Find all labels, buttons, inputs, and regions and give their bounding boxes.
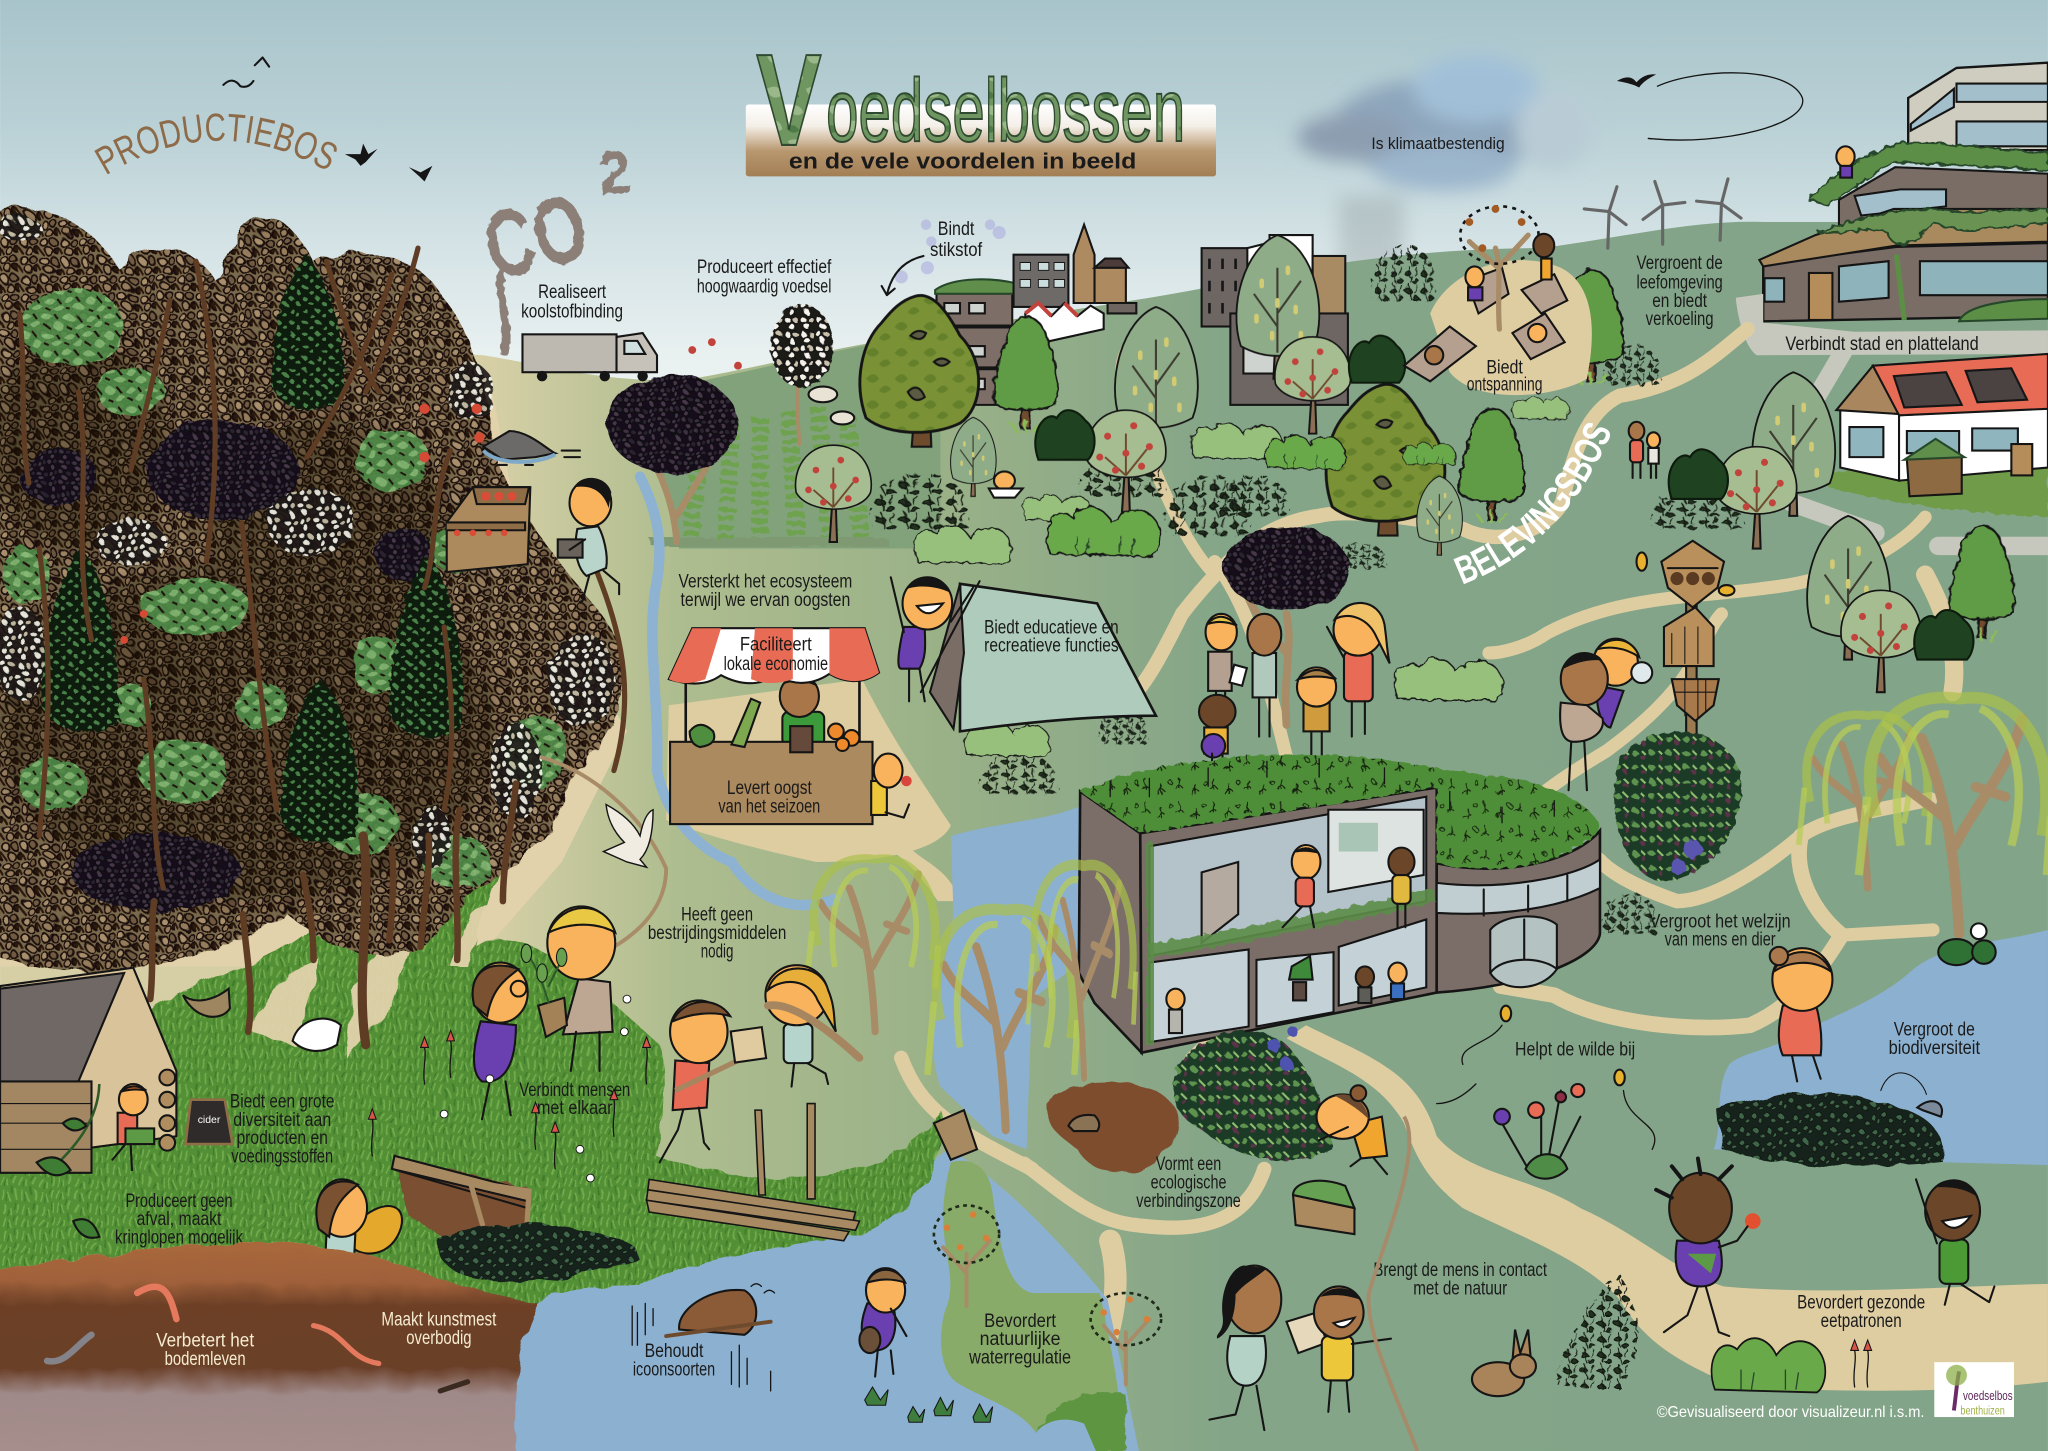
label: koolstofbinding: koolstofbinding xyxy=(521,301,623,322)
label: vergroent de leefomgeving: leefomgeving xyxy=(1637,273,1723,294)
mulch pile with hedgehog xyxy=(1045,1082,1179,1172)
label: diversiteit: producten en xyxy=(236,1128,328,1149)
seller xyxy=(780,675,824,746)
small fruit tree on island xyxy=(934,1205,999,1306)
label: hoogwaardig voedsel: Produceert effectief xyxy=(697,257,832,278)
vegetable crate xyxy=(1293,1181,1354,1234)
CO2 smoke xyxy=(473,138,634,355)
girl and man with seedling xyxy=(473,906,615,1119)
island with water regulation label: Bevordert xyxy=(984,1311,1057,1332)
title banner: V xyxy=(756,27,822,173)
jumping child xyxy=(1916,1179,1994,1305)
girl with wheelbarrow xyxy=(303,1179,402,1313)
island with water regulation label xyxy=(941,1161,1126,1451)
logo voedselbos benthuizen xyxy=(1934,1362,2014,1417)
island with water regulation label: waterregulatie xyxy=(968,1347,1071,1368)
apple crate xyxy=(447,487,530,572)
light green bushes xyxy=(914,397,1569,757)
soil layers: Verbetert het xyxy=(156,1331,255,1352)
vertical planted column xyxy=(1615,732,1741,882)
lily pads xyxy=(1938,923,1996,965)
title PRODUCTIEBOS: PRODUCTIEBOS xyxy=(94,113,337,174)
green roof xyxy=(1080,754,1600,869)
big right-hand willows xyxy=(1799,697,2048,934)
rabbit xyxy=(1472,1330,1536,1396)
water lilies xyxy=(865,1387,993,1422)
child at shed xyxy=(112,1084,154,1170)
white blossom crowns xyxy=(0,215,615,867)
pear trees xyxy=(951,235,1890,660)
market stall: Faciliteert xyxy=(740,634,812,655)
label: biodiversiteit: Vergroot de xyxy=(1894,1020,1975,1041)
right lake xyxy=(1714,930,2048,1165)
title banner: oedselbossen xyxy=(826,61,1185,160)
market stall: lokale economie xyxy=(724,654,828,675)
market stall xyxy=(669,628,879,824)
tall green trees xyxy=(993,270,2014,641)
log stack at lake edge xyxy=(934,1110,977,1160)
label: eetpatronen: Bevordert gezonde xyxy=(1797,1293,1925,1314)
truck xyxy=(522,333,657,381)
apple trees xyxy=(1086,337,1921,692)
label: icoonsoorten xyxy=(633,1341,715,1380)
birds in the sky xyxy=(223,57,1803,182)
lower lake xyxy=(513,1149,1139,1451)
island with water regulation label: natuurlijke xyxy=(980,1329,1061,1350)
label: kringlopen xyxy=(115,1191,243,1248)
apple tree orchard xyxy=(795,445,871,542)
relax area with blankets: ontspanning xyxy=(1467,375,1542,396)
small couple xyxy=(1629,422,1660,478)
CO2 smoke: 2 xyxy=(594,138,634,208)
label: welzijn: Vergroot het welzijn xyxy=(1650,911,1791,932)
label: bindt stikstof with arrow: Bindt xyxy=(938,219,975,240)
fish xyxy=(1881,1073,1942,1117)
label: ecologische verbindingszone: Vormt een xyxy=(1156,1154,1221,1175)
label: kringlopen: Produceert geen xyxy=(125,1191,233,1212)
heading BELEVINGSBOS: BELEVINGSBOS xyxy=(1454,423,1610,584)
label: vergroent de leefomgeving xyxy=(1637,253,1723,330)
darker lower canopy shade xyxy=(0,340,496,901)
label: vergroent de leefomgeving: en biedt xyxy=(1652,291,1708,312)
beige footpaths xyxy=(666,329,2048,1391)
nettle bed xyxy=(1718,1093,1944,1166)
green bushes xyxy=(1047,435,1455,556)
conifers xyxy=(42,255,463,842)
label: ecologische verbindingszone: verbindingszone xyxy=(1136,1191,1241,1212)
town buildings on the hill xyxy=(935,225,1348,405)
label: verbindt mensen: Verbindt mensen xyxy=(519,1080,630,1101)
market stall: van het seizoen xyxy=(718,796,820,817)
productiebos forest xyxy=(0,209,666,1045)
label: bestrijdingsmiddelen xyxy=(648,905,786,962)
label: eetpatronen: eetpatronen xyxy=(1821,1311,1902,1332)
logo voedselbos benthuizen: benthuizen xyxy=(1960,1404,2005,1417)
elder tree xyxy=(607,338,742,542)
green bush with poppies xyxy=(1712,1338,1872,1392)
logo voedselbos benthuizen: voedselbos xyxy=(1963,1388,2013,1403)
label: icoonsoorten: icoonsoorten xyxy=(633,1359,715,1380)
trunks xyxy=(20,248,666,1045)
label: diversiteit: voedingsstoffen xyxy=(231,1146,333,1167)
label: koolstofbinding: Realiseert xyxy=(538,282,607,303)
meadow flowers xyxy=(368,995,650,1182)
CO2 smoke: CO xyxy=(473,173,598,299)
label: versterkt het ecosysteem xyxy=(679,572,852,611)
dark bushes xyxy=(1035,336,1973,660)
label: koolstofbinding xyxy=(521,282,623,322)
girl with basket in water xyxy=(859,1268,906,1377)
person in a bath xyxy=(989,471,1023,498)
label: helpt de wilde bij: Helpt de wilde bij xyxy=(1515,1039,1635,1060)
grey road to the city xyxy=(1736,294,2048,546)
green foliage patches xyxy=(3,287,567,888)
sheep xyxy=(809,387,854,424)
compost bin xyxy=(392,1156,529,1238)
central green roof building xyxy=(1079,754,1600,1053)
spiky dark shrubs xyxy=(869,245,1744,934)
lawn by the houses xyxy=(1826,457,2048,516)
forest beige grass stripes xyxy=(248,901,494,1058)
white blossom tree xyxy=(771,304,833,444)
central lake xyxy=(933,802,1091,1149)
title banner: en de vele voordelen in beeld xyxy=(789,148,1136,173)
beaver with branch xyxy=(666,1284,775,1336)
label: diversiteit: Biedt een grote xyxy=(230,1092,334,1113)
label: bestrijdingsmiddelen: bestrijdingsmiddelen xyxy=(648,923,786,944)
label: brengt de mens in contact: met de natuur xyxy=(1413,1278,1507,1299)
label: verbindt mensen xyxy=(519,1080,630,1119)
leafy shrub xyxy=(1554,1273,1638,1391)
shed with logs xyxy=(0,968,176,1238)
gardener leaning xyxy=(1317,1085,1387,1174)
label: diversiteit xyxy=(230,1092,334,1167)
hanging vine xyxy=(52,1084,99,1169)
canopy colour base xyxy=(0,209,624,972)
green grass meadow xyxy=(0,797,943,1306)
label: welzijn xyxy=(1650,911,1791,951)
tent with educational label xyxy=(921,581,1156,731)
label: brengt de mens in contact xyxy=(1373,1260,1548,1299)
skyline: high-rise and green roof building xyxy=(1759,63,2048,321)
chalkboard sign: cider xyxy=(198,1115,221,1126)
cloud with climate label xyxy=(1297,55,1593,274)
label: diversiteit: diversiteit aan xyxy=(233,1110,331,1131)
label: versterkt het ecosysteem: terwijl we ervan oogsten xyxy=(681,590,850,611)
label: ecologische verbindingszone: ecologische xyxy=(1151,1172,1226,1193)
hugging pair with magnifier xyxy=(1560,552,1734,790)
man with basket xyxy=(558,478,619,602)
bottom pair with map xyxy=(1209,1266,1391,1430)
label: brengt de mens in contact: Brengt de mens in contact xyxy=(1373,1260,1548,1281)
label: hoogwaardig voedsel: hoogwaardig voedsel xyxy=(697,277,831,298)
label: icoonsoorten: Behoudt xyxy=(645,1341,704,1362)
dark elder crowns xyxy=(20,421,434,912)
lower persimmon tree xyxy=(1091,1293,1161,1384)
label: vergroent de leefomgeving: Vergroent de xyxy=(1637,253,1723,274)
relax area with blankets: Biedt xyxy=(1486,358,1524,379)
soil layers: Maakt kunstmest xyxy=(381,1310,497,1331)
red roof houses xyxy=(1836,354,2048,496)
orchard strip with crop rows xyxy=(640,333,940,549)
tent with educational label: recreatieve functies xyxy=(984,636,1119,657)
label: ecologische verbindingszone xyxy=(1136,1154,1241,1212)
label: kringlopen: afval, maakt xyxy=(137,1209,222,1230)
chickens xyxy=(183,989,341,1051)
stream xyxy=(640,477,836,905)
soil layers: overbodig xyxy=(406,1328,472,1349)
flowers and bees xyxy=(1437,1006,1655,1179)
wind turbines xyxy=(1584,179,1741,248)
chalkboard sign xyxy=(186,1100,233,1144)
brown leaf rings xyxy=(0,209,624,972)
forest floor beige xyxy=(0,379,627,966)
group around the tree xyxy=(1199,526,1390,780)
label: biodiversiteit: biodiversiteit xyxy=(1889,1038,1981,1059)
market stall: Levert oogst xyxy=(727,778,812,799)
label: kringlopen: kringlopen mogelijk xyxy=(115,1227,243,1248)
willow in front of building corner xyxy=(1028,865,1136,1077)
big oak trees xyxy=(860,295,1445,535)
people in building xyxy=(1283,845,1320,927)
cloud with climate label: Is klimaatbestendig xyxy=(1371,134,1505,153)
label: bindt stikstof with arrow xyxy=(882,219,1006,295)
copyright line: ©Gevisualiseerd door visualizeur.nl i.s.m. xyxy=(1657,1404,1925,1421)
label: bestrijdingsmiddelen: Heeft geen xyxy=(681,905,753,926)
cheering person at tent xyxy=(891,577,973,701)
running dark child with fruit xyxy=(1656,1158,1761,1336)
tent with educational label: Biedt educatieve en xyxy=(984,617,1119,638)
label: versterkt het ecosysteem: Versterkt het ecosysteem xyxy=(679,572,852,593)
girl carrying logs xyxy=(765,965,859,1087)
willows at central lake xyxy=(806,858,1078,1130)
label: bindt stikstof with arrow: stikstof xyxy=(930,240,983,261)
label: eetpatronen xyxy=(1797,1293,1925,1332)
label: verbindt mensen: met elkaar xyxy=(537,1098,613,1119)
person on roof xyxy=(1836,146,1855,178)
title banner xyxy=(746,27,1216,176)
winding vine trail xyxy=(1368,1117,1417,1451)
label: welzijn: van mens en dier xyxy=(1665,930,1776,951)
label: biodiversiteit xyxy=(1889,1020,1981,1059)
flying bird of prey xyxy=(603,805,653,867)
soil layers: bodemleven xyxy=(165,1349,246,1370)
garden bed with plants xyxy=(1173,1027,1332,1160)
dark nettle hedge xyxy=(438,1224,640,1283)
boy with birdhouse xyxy=(660,1000,766,1162)
worms xyxy=(47,1287,468,1391)
insect hotel xyxy=(1661,541,1724,757)
relax area with blankets xyxy=(1404,205,1592,396)
soil layers xyxy=(0,1243,538,1451)
label: vergroent de leefomgeving: verkoeling xyxy=(1646,309,1714,330)
reeds xyxy=(632,1303,771,1391)
wooden shed xyxy=(1904,439,1964,496)
woman sitting xyxy=(1770,947,1832,1081)
label: hoogwaardig voedsel xyxy=(697,257,832,298)
child eating apple xyxy=(871,754,912,818)
log pile xyxy=(647,1104,859,1241)
label: bestrijdingsmiddelen: nodig xyxy=(701,941,733,962)
drone xyxy=(483,431,580,465)
bee xyxy=(1637,552,1647,571)
label: verbindt stad en platteland: Verbindt stad en platteland xyxy=(1785,334,1979,355)
